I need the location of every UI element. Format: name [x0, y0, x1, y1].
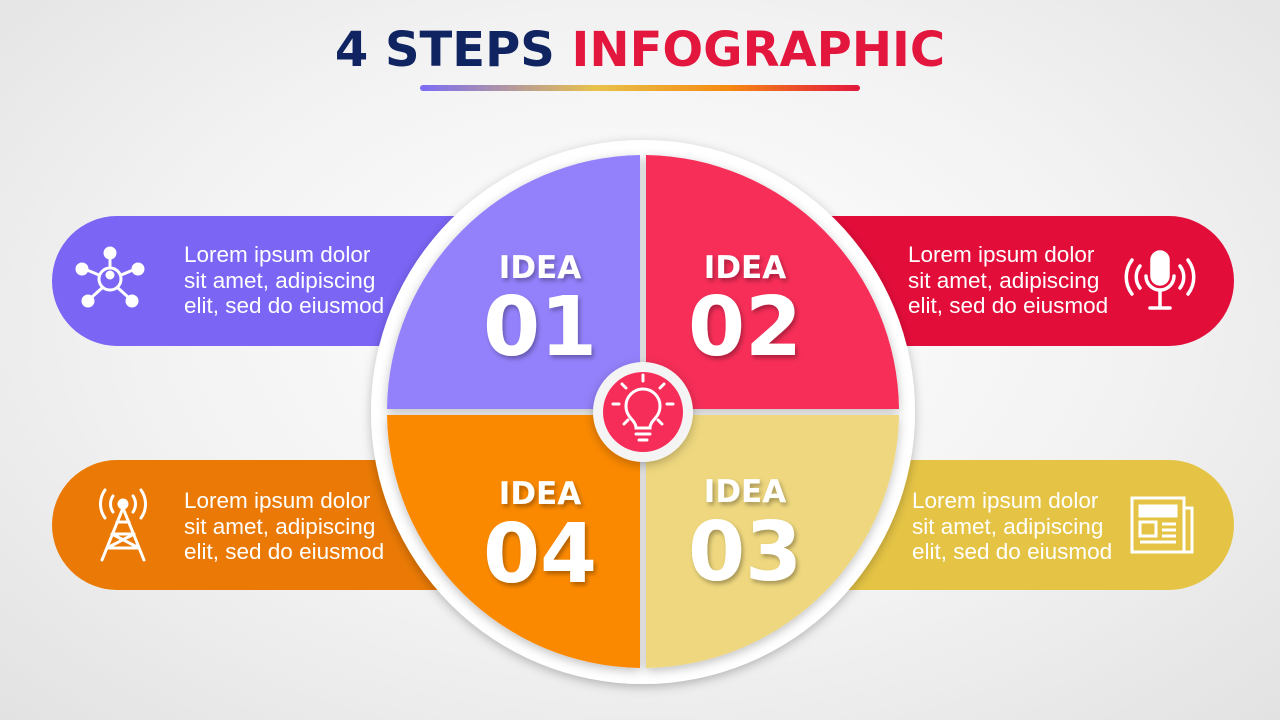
chart: circle: IDEA: [499, 250, 581, 286]
icon: newspaper: [1130, 496, 1194, 554]
text 1: elit, sed do eiusmod: [184, 293, 384, 318]
chart: circle: 03: [688, 505, 802, 600]
quadrant 1: [387, 155, 640, 409]
text 1: sit amet, adipiscing: [184, 268, 375, 292]
text 1: Lorem ipsum dolor: [184, 242, 370, 267]
icon: microphone: [1124, 250, 1196, 310]
icon: tower: [99, 488, 147, 562]
text 4: sit amet, adipiscing: [184, 514, 375, 538]
panel: pill 3: [714, 460, 1234, 590]
text 4: [184, 488, 384, 564]
text 3: [912, 488, 1112, 564]
center bulb: [593, 362, 693, 462]
chart: circle: 04: [483, 507, 597, 602]
text 2: [908, 242, 1108, 318]
text 3: sit amet, adipiscing: [912, 514, 1103, 538]
quadrant 3: [646, 415, 899, 668]
quadrant 4: [387, 415, 640, 668]
text 2: sit amet, adipiscing: [908, 268, 1099, 292]
panel: pill 4: [52, 460, 572, 590]
text 2: elit, sed do eiusmod: [908, 293, 1108, 318]
text 2: Lorem ipsum dolor: [908, 242, 1094, 267]
panel: pill 1: [52, 216, 572, 346]
chart: circle: IDEA: [499, 476, 581, 512]
chart: circle: 02: [688, 280, 802, 375]
title underline: [420, 85, 860, 91]
title: 4 STEPS INFOGRAPHIC: [335, 22, 945, 78]
text 3: Lorem ipsum dolor: [912, 488, 1098, 513]
text 4: Lorem ipsum dolor: [184, 488, 370, 513]
quadrant 2: [646, 155, 899, 409]
chart: circle: IDEA: [704, 474, 786, 510]
chart: circle: 01: [483, 280, 597, 375]
chart: circle: IDEA: [704, 250, 786, 286]
text 4: elit, sed do eiusmod: [184, 539, 384, 564]
text 1: [184, 242, 384, 318]
icon: network: [76, 246, 144, 308]
text 3: elit, sed do eiusmod: [912, 539, 1112, 564]
panel: pill 2: [714, 216, 1234, 346]
